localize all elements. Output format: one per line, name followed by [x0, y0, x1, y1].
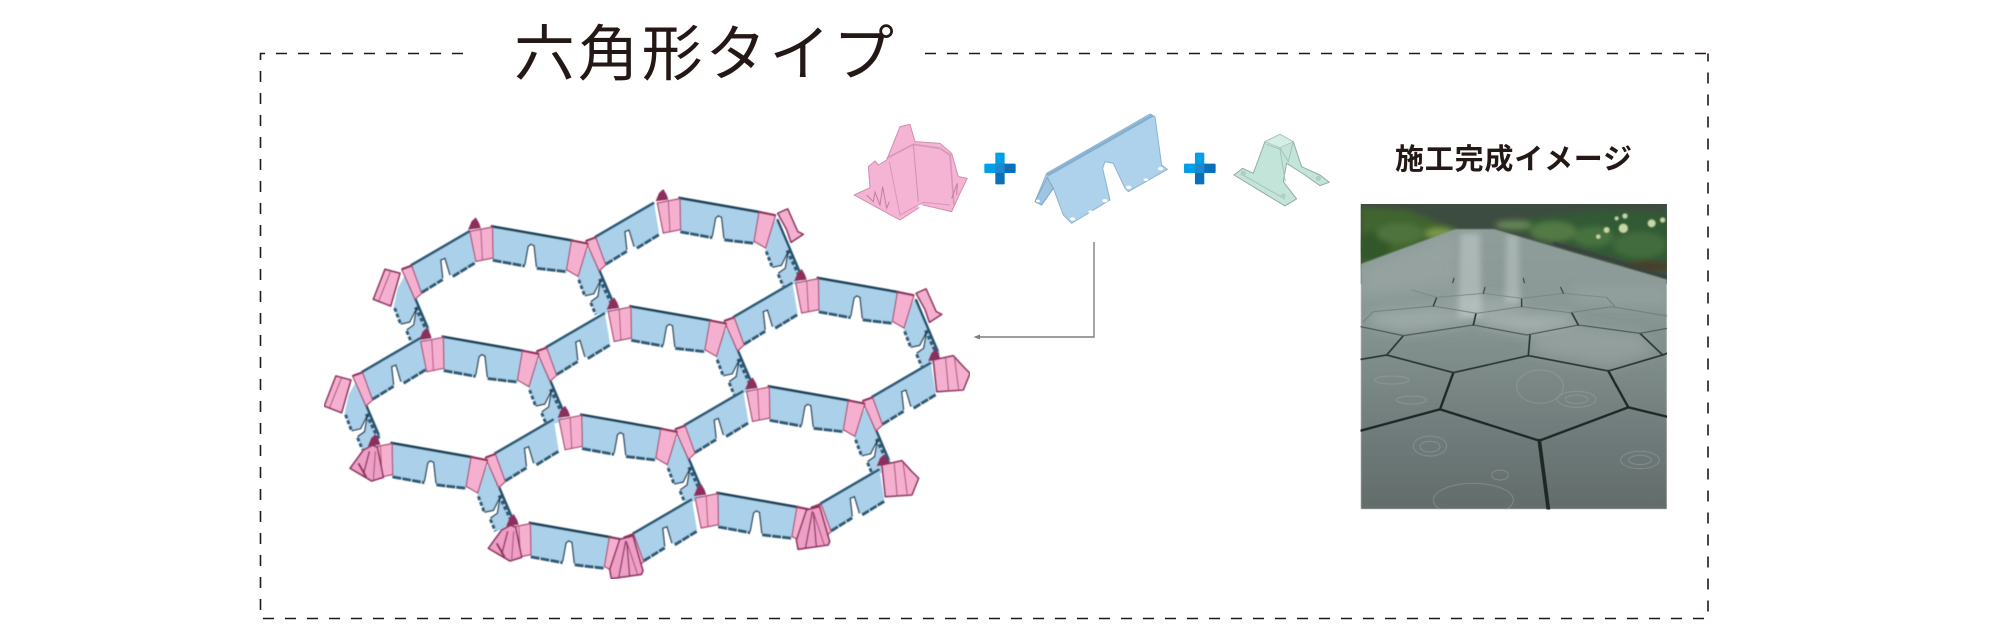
photo paving joints: [1361, 278, 1667, 509]
icon: plus sign: [984, 153, 1016, 184]
heading: completion image: 施工完成イメージ: [1395, 143, 1633, 176]
title: 六角形タイプ: [514, 20, 897, 88]
mesh walls: rising sides: [353, 203, 936, 568]
hexagon mesh assembly: [324, 189, 970, 579]
photo rain ripples: [1374, 370, 1659, 517]
icon: blue wall part: [1035, 114, 1167, 223]
icon: pink corner part: [854, 124, 967, 220]
panel: dashed frame: [260, 54, 1708, 618]
photo road surface: [1361, 229, 1667, 509]
icon: green cap part: [1234, 134, 1329, 206]
mesh walls: falling sides with pink joints: [368, 189, 914, 573]
icon: plus sign: [1184, 153, 1216, 184]
corner end caps: [324, 209, 970, 579]
photo background and vegetation: [1357, 204, 1670, 284]
component parts row: [854, 114, 1329, 223]
mesh walls: steep sides: [345, 217, 940, 531]
photo reflections: [1361, 233, 1667, 368]
arrow: parts to mesh: [974, 242, 1094, 340]
photo: wet hexagonal paving: [1357, 204, 1670, 517]
